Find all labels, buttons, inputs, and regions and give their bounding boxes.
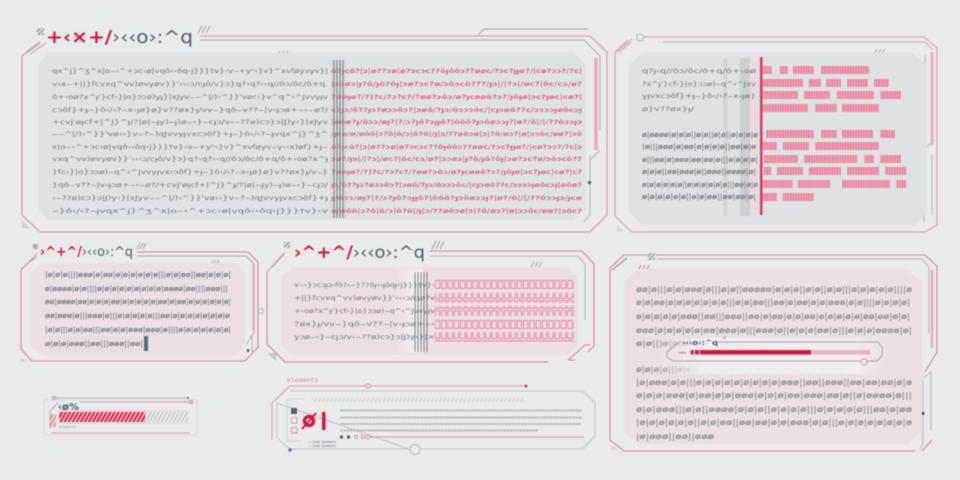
binary text block: |ø|||øøø|ø|øø|ø|ø|ø|ø||øø|ø|ø xyxy=(642,143,756,152)
encoded text block: ⌢}ô‹/‹?⌢ɟvqx^j}^ʒ^x|o⌢‹^+ɔc‹ø|vqô‹‹ôq‹j}}}†v}‹v xyxy=(52,207,328,215)
panel: elements xyxy=(272,377,595,454)
encoded text block: yɔø⌣‹}⌢cɟɔ/v‹⌢??ø)cɔ}ɔ|J)y‹}|× xyxy=(294,333,435,341)
decoded red text block xyxy=(330,67,583,216)
decoded red text block: |ɔɔøɔ|ɟ?ô/ɟô?ôɟ|ɔø?ɔc?ø/ɔôɔcô???/ɟɔ|/|?ɔ|/øc?|ôc/cɔ/ø? xyxy=(331,80,582,89)
encoded text block: +cvj'øɟcf+|^J}^ɟ/?|ø|⌢ɟy)⌢ɟ)ø⌣‹}⌢cɟɔ/v‹⌢??ø)cɔ}ɔ|J)y‹}|xJyv xyxy=(52,118,328,126)
tiny captions: ▪ FOUR SEGMENTS xyxy=(309,445,336,448)
encoded text block: ?x^ɟ'}cf‹}|o}ɔɔø)⌢q^‹^Jvv xyxy=(642,80,756,88)
binary text block upper: ø|ø|øø|ø|ø|ø|ø|ø|ø|ø|||ø|ø|øø|||øø|ø|øø|ø|ø|øøø|ø|ø||||ø|ø|ø|ø| xyxy=(636,298,910,307)
tiny captions xyxy=(309,441,336,448)
binary text rows: øøøøøøøøøøøøøøøøøøøøøøøøøøøøøøøøøøøøøøøøøøøøøøøøøøøøøøøøøøøøøøøøøøøøøøøøøøøø xyxy=(340,414,583,420)
striped progress bar xyxy=(59,411,188,423)
binary text block: ø|ø|ø|øøø||øø|||øøø||øø| xyxy=(45,340,143,349)
panel frame xyxy=(610,253,937,451)
decoded red text block: ô?ɟcô?|ɔ|ø??ɔø|ø?ɔcɔc??ôɟôôɔ??øøc/?ɔc?ɟɟø?/|cø?ɔɔ?/?c|ɔ xyxy=(331,143,582,152)
text panel background xyxy=(31,263,245,356)
redacted boxes xyxy=(435,280,574,342)
vertical scan lines xyxy=(331,60,346,218)
binary text block lower xyxy=(636,378,913,441)
encoded text block: ⌣⌢^|/)‹^}}'vø‹‹}v⌣?⌢)qJvvyɟvxcɔôf}+ɟ⌢}ô‹/‹?⌢ɟvqx^j}^ʒ^ xyxy=(52,130,328,138)
binary text rows: øøøøøøøøøøøøøøøøøøøøøøøøøøøøøøøøøøøøøøøøøøøøøøøøøøøøøøøøøøøøøøøøøøøøøøøøøøøø xyxy=(340,408,583,412)
binary text block: ø|ø|ø|ø|ø|ø||ø|ø|ø|ø|ø|ø|||øø|ø|ø xyxy=(642,181,758,190)
encoded text block: v⌢‹}ɔcɔɟɔ‹fô?‹⌢}??ôɟ‹‹ɟôqɟ‹j}}}†v}‹ xyxy=(294,281,435,289)
frame xyxy=(272,384,595,454)
fade veil behind progress widget xyxy=(650,338,895,374)
hatch strip xyxy=(312,398,525,402)
decoded red text block: ɔø?/ɟɔ|/|?ɔ|/øc?|ôc/cɔ/ø?|ɔɔøɔ|ɟ?ô/ɟô?ôɟ|ɔø?ɔc?ø/ɔôɔcô?? xyxy=(331,155,582,164)
cursor xyxy=(144,336,148,351)
binary text rows: øøøøøøøøøøøøøøøøøøøøøøøøøøøøøøøøøøøøøøøøøøøøøøøøøøøøøøøøøøøøøøøøøøøøøøøøøøøø xyxy=(340,421,582,426)
binary text block upper: ø|ø|||ø|ø|ø|øøø|ø|ø|ø|øø xyxy=(636,339,757,348)
redacted barcode bars xyxy=(762,66,906,201)
binary text rows: øøøøøøøøøøøøøøøøøøøøøøøøøøøøøøøøøøøøøøøøøøøøøøøøøøøøøøøøøøøøøøø xyxy=(340,428,539,432)
encoded text block: x|o⌢‹^+ɔc‹ø|vqô‹‹ôq‹j}}}†v}‹v⌢+yⁿ‹}v}^xvføyv⌣y‹‹x)øf}+ɟ⌢ xyxy=(52,143,328,151)
binary text block upper: øøø|ø|ø|ø|ø|ø|øø|øøø|ø|||øøø|ø||ø|ø|ø|øø|ø|||ø|ø|ø|øøøø|ø| xyxy=(636,326,912,335)
decoded red text block: ?øøɟø?/?)?c/?ɔ?c?/?øø?ɔôɔ/ø?ɟcøøô?ɔ?/ɟôɟø|ɔc?ɟøc|cø?|c? xyxy=(331,168,582,177)
tiny captions: ▪ FOUR SEGMENTS xyxy=(309,441,336,444)
decoded red text block: ɟɔ/ô??ɟɔ?øɔɔôɔ?|ɔøô/?ɟɔ/ôɔɔɔôc/|cɟɔøô??c/ɔɔɔɔɟøôcɔɟ|øôø? xyxy=(330,181,582,190)
panel frame xyxy=(22,26,607,232)
encoded text block: ?øx}ɟ/vv⌣}qô⌣v??⌢|v‹ɟɔø+⌢‹ xyxy=(294,320,435,328)
encoded text block: vxq^vv)øvyøv}}'‹‹‹ɔ/cɟô/v}ɔ}q?‹q?‹‹q//ôɔ/ôc/ô+q/ô+‹oø?x^ɟ xyxy=(52,155,328,163)
label: elements: elements xyxy=(287,377,318,384)
encoded text block: +‹oø?x^ɟ'}cf‹}|o}ɔɔø)⌢q^‹^Jvvyɟv xyxy=(294,307,435,315)
widget title: ›‹‹o›:^q xyxy=(682,339,718,347)
panel: bottom centre decoding xyxy=(267,241,594,362)
decoded red text block: /ɟcø/ø/øôô|ɔ?ô|ô/ɔ|ô?ô|/ɟ|ɔ/??øôɔø|ɔ|?ô/øɔ?|ø|ɔɔôc/øø?|ɔô xyxy=(331,130,583,139)
panel: large text decoding xyxy=(22,26,607,232)
encoded text block: }fc‹}|o}ɔɔø)⌢q^‹^Jvvyɟvx‹ɔôf}+ɟ⌢}ô‹/‹?⌢x‹ɟø}ø}v??øx}ɟ/v⌣} xyxy=(52,168,328,176)
binary text block: ø|øøøø|ø|ø||||ø|ø|ø|ø|ø|ø|ø|ø|ø|øøøø|øø||||øøø||| xyxy=(45,285,228,294)
progress widget xyxy=(667,336,882,365)
widget percent: +4% xyxy=(678,350,687,355)
heading: text/decoding: +‹×+/ ›‹‹o›:^q xyxy=(46,27,193,48)
decoded red text block: ɟ/ôɔɔ/øɟ?|?/ɔ?ɟô?ɔɟɟô?|ôôô?ɟɔôøɔɔɟ?|ø?/ô|/|/??ôɔɔɟɔ/ɟcø xyxy=(330,194,583,203)
binary text block: ø|øøøø|ø|ø|ø||ø|ø||ø|ø||ø|ø|ø|ø xyxy=(642,131,758,140)
binary text block lower: |ø|øøø|ø|ø|||ø|ø|ø|ø|ø|ø|ø|ø|ø|øøø||øø||øøø||øø|øø|øø|ø|ø xyxy=(636,378,913,387)
binary text block lower: |ø|øøø||øø||øøø xyxy=(636,432,715,441)
frame xyxy=(44,396,197,435)
encoded text block: qx^j}^ʒ^x|o⌢‹^+ɔc‹ø|vqô‹‹ôq‹j}}}†v}‹v⌢+yⁿ‹}v}^xvføyvyv}| xyxy=(52,67,328,75)
panel frame xyxy=(615,34,937,232)
panel: small progress indicator xyxy=(44,396,197,435)
pager dots and red line xyxy=(340,435,584,439)
decoded red text block: |øôø?ɟ/ôɔɔ/øɟ?|?/ɔ?ɟô?ɔɟɟô?|ôôô?ɟɔôøɔɔɟ?|ø?/ô|/|/??ôɔɔɟɔ xyxy=(331,118,582,127)
binary text block: ø|||øø|ø|øøø|øø|øø|ø|||ø|ø|ø|ø| xyxy=(642,156,758,165)
binary text block upper xyxy=(636,285,913,374)
binary text block: |ø|ø|ø||||øøø|ø|øø|ø|ø|ø|ø|ø|ø|||ø|ø|øø||øø|ø|ø|ø| xyxy=(45,271,231,280)
text panel background xyxy=(281,267,578,355)
encoded text block: q?ɟ‹q//ôɔ/ôc/ô+q/ô+‹oø xyxy=(642,67,756,75)
icon squares xyxy=(291,408,297,433)
fade highlight xyxy=(395,269,423,353)
decoded red text block: ?øøɟø?/?)?c/?ɔ?c?/?øø?ɔôɔ/ø?ɟcøøô?ɔ?/ɟôɟø|ɔc?ɟøc|cø?| xyxy=(331,93,582,102)
encoded text block: cɔôf}+ɟ⌢}ô‹/‹?⌢x‹ɟø}ø}v??øx}ɟ/vv⌣}qô⌣v??⌢|v‹ɟɔø+⌢‹⌣ø?/ xyxy=(52,106,329,114)
binary text block upper: ø|ø|ø|ø|||ø|ø|ø|ø|ø|ø|ø|ø|ø|ø|ø|ø||ø|ø|ø|ø|ø|ø|ø| xyxy=(636,365,846,374)
small caption: elements xyxy=(59,425,76,430)
heading: text/decoding: ›^+^/›‹‹o›:^q xyxy=(294,243,425,263)
encoded text block: ‹⌢??ø)cɔ}ɔ|J)y‹}|xJyv⌣⌢^|/)‹^}}'vø‹‹}v⌣?⌢)qJvvyɟvxcɔôf}+ɟ xyxy=(52,194,328,202)
binary text block: ø|ø|ø|ø|ø|ø||ø|ø|øø||øø|øø|ø| xyxy=(642,193,756,202)
binary text block: øø|øøø|ø|||øøø|ø|||ø|ø|ø|ø|ø|||øø|ø|ø|ø|ø|ø|ø|ø|ø xyxy=(45,312,230,321)
text panel background xyxy=(624,269,922,444)
encoded text block xyxy=(294,281,435,341)
decoded red text block: c?ɟɔ/ô??ɟɔ?øɔɔôɔ?|ɔøô/?ɟɔ/ôɔɔɔôc/|cɟɔøô??c/ɔɔɔɔɟøôcɔɟ xyxy=(331,106,583,115)
heading: text/decoding: ›^+^/›‹‹o›:^q xyxy=(40,245,133,260)
panel frame xyxy=(267,241,594,362)
binary text rows xyxy=(340,408,583,432)
binary text block lower: ø|ø|ø|øøø|ø|øø|ø|ø|øøø|ø|ø|ø|øø|øøø|øø|ø||ø|øøøø|ø||| xyxy=(636,391,912,400)
vertical scan lines xyxy=(415,272,427,352)
encoded text block: ø}v??øx}ɟ/ xyxy=(642,105,695,113)
binary text block: |ø|ø|||ø|ø|øø|||øø|ø|ø|øøø|øøø|ø||||ø|ø|ø|ø|ø|ø|ø| xyxy=(45,326,231,335)
text panel background xyxy=(38,53,586,220)
encoded text block xyxy=(52,67,329,215)
binary text block xyxy=(642,131,758,202)
encoded text block: +||}fcvxq^vv)øvyøv}}'‹‹‹ɔ/cɟø?v xyxy=(294,294,435,302)
panel frame xyxy=(21,243,264,362)
encoded text block: ô+‹oø?x^ɟ'}cf‹}|o}ɔɔø)yɟ}|xJyv⌣⌢^|/)‹^}}'vøc‹}v^q^‹^Jvvyɟv xyxy=(52,93,328,101)
binary text block lower: |ø|ø|ø|ø|ø|ø||ø|ø|øø||øø|øø|ø|ø|øøø|ø|ø|||ø|ø|ø|ø|ø|ø|ø|ø xyxy=(636,418,913,427)
panel: bottom left binary xyxy=(21,243,264,362)
binary text block lower: ø|ø|øøø|||ø|ø||øøøø|ø|ø|ø||ø|ø|ø|ø|||ø|ø|ø|ø|ø|||øø|ø|øø xyxy=(636,405,913,414)
decoded red text block: ô?ɟcô?|ɔ|ø??ɔø|ø?ɔcɔc??ôɟôôɔ??øøc/?ɔc?ɟɟø?/|cø?ɔɔ?/?c| xyxy=(331,67,582,76)
encoded text block: yɟvxcɔôf}+ɟ⌢}ô‹/‹?⌢x‹ɟø} xyxy=(642,92,756,100)
binary text block upper: øø|ø|||ø|ø|øøø|ø|||ø|ø||øøøøø|ø|ø|ø||ø|ø||ø|ø|||ø|ø|ø|ø|ø||||ø xyxy=(636,285,913,294)
binary text block xyxy=(45,271,231,349)
binary text block: ø|ø|ø||øø|øøø|ø||øøø||øøøø|ø| xyxy=(642,168,756,177)
encoded text block xyxy=(642,67,756,113)
panel: top right decoding xyxy=(615,34,937,232)
vertical bands xyxy=(723,58,761,216)
binary text block: øø|øøøø|øø|ø|ø|ø|øø|ø|ø|ø|ø|ø|øø|ø|øø|ø|ø|ø|ø|ø|ø| xyxy=(45,298,231,307)
text panel background xyxy=(629,53,927,225)
decoded red text block: ø/øôô|ɔ?ô|ô/ɔ|ô?ô|/ɟ|ɔ/??øôɔø|ɔ|?ô/øɔ?|ø|ɔɔôc/øø?|ɔôc? xyxy=(331,207,582,216)
percent label: ‹ø% xyxy=(58,402,79,413)
encoded text block: }qô⌣v??⌢|v‹ɟɔø+⌢‹⌣ø?/+cvj'øɟcf+|^J}^ɟ/?|ø|⌢ɟy)⌢ɟ)ø⌣‹}⌢cɟɔ/ xyxy=(52,181,329,189)
red scan line xyxy=(760,57,762,215)
binary text block upper: ø|ø|ø|ø|ø|øøø||øø|||øøø||øø|ø|øø|ø|ø|øø|ø|ø|ø|ø|ø|øø|øø|ø|ø| xyxy=(636,312,910,321)
panel: bottom right binary xyxy=(610,253,937,451)
encoded text block: v‹x⌢+||}fcvxq^vv)øvyøv}}'‹‹‹ɔ/cɟô/v}ɔ}q?‹q?‹‹q//ôɔ/ôc/ô+q. xyxy=(52,80,328,88)
red logo glyphs xyxy=(302,412,326,430)
